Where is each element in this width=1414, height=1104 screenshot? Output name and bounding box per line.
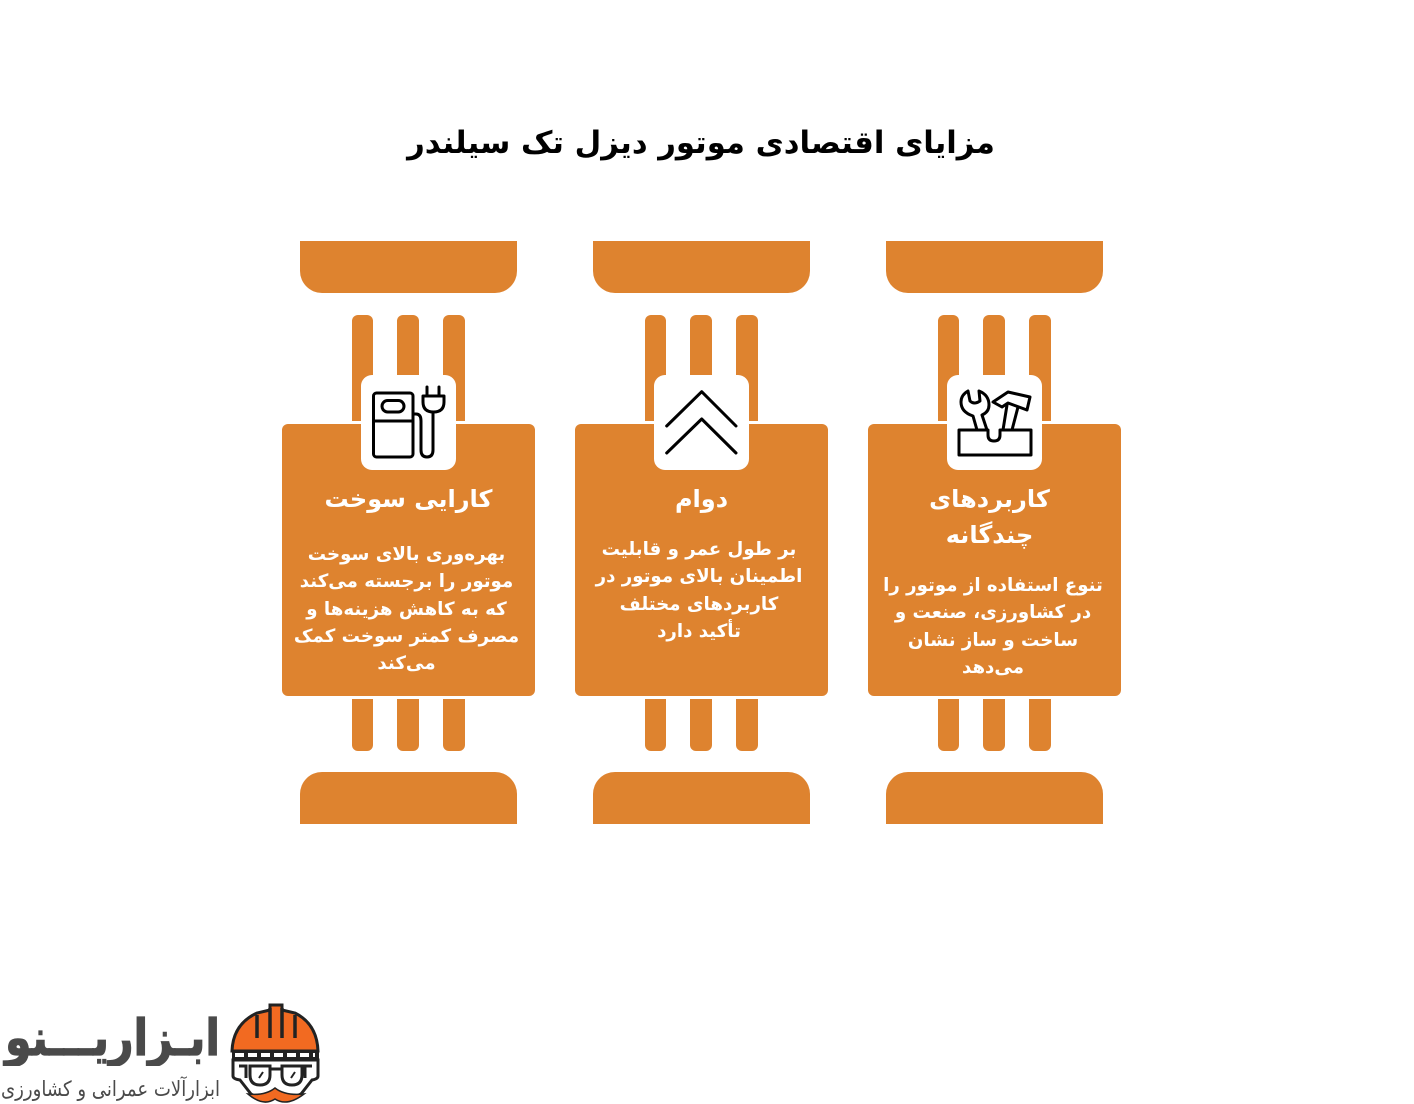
heading: durability: دوام bbox=[675, 485, 728, 513]
heading: versatile applications: چندگانه bbox=[946, 521, 1033, 549]
text: fuel efficiency: موتور را برجسته می‌کند bbox=[300, 571, 513, 592]
text: durability: اطمینان بالای موتور در bbox=[596, 566, 802, 587]
heading: versatile applications bbox=[929, 485, 1050, 549]
text: versatile applications: می‌دهد bbox=[962, 657, 1024, 678]
text: versatile applications bbox=[883, 575, 1103, 678]
text: fuel efficiency: که به کاهش هزینه‌ها و bbox=[306, 599, 507, 620]
text: versatile applications: تنوع استفاده از موتور را bbox=[883, 575, 1103, 596]
text: versatile applications: در کشاورزی، صنعت و bbox=[895, 602, 1091, 623]
text: durability: تأکید دارد bbox=[657, 621, 741, 642]
text: fuel efficiency bbox=[294, 544, 519, 674]
panel: durability bbox=[575, 241, 828, 824]
icon: toolbox with wrench and hammer bbox=[958, 389, 1032, 456]
icon: double chevron up bbox=[665, 390, 738, 455]
text: durability bbox=[594, 539, 802, 642]
icon: fuel pump with plug bbox=[372, 386, 446, 458]
text: durability: کاربردهای مختلف bbox=[620, 594, 778, 615]
heading: versatile applications: کاربردهای bbox=[929, 485, 1050, 513]
heading: fuel efficiency: کارایی سوخت bbox=[324, 485, 492, 513]
title: مزایای اقتصادی موتور دیزل تک سیلندر bbox=[407, 126, 995, 161]
icon: helmet mascot bbox=[230, 1004, 320, 1103]
text: fuel efficiency: مصرف کمتر سوخت کمک bbox=[294, 626, 519, 647]
logo: brand mark bbox=[1, 1004, 320, 1103]
text: fuel efficiency: می‌کند bbox=[377, 653, 436, 674]
text: versatile applications: ساخت و ساز نشان bbox=[908, 630, 1078, 651]
text: durability: بر طول عمر و قابلیت bbox=[602, 539, 796, 560]
panel: versatile applications bbox=[868, 241, 1121, 824]
text: fuel efficiency: بهره‌وری بالای سوخت bbox=[308, 544, 505, 565]
